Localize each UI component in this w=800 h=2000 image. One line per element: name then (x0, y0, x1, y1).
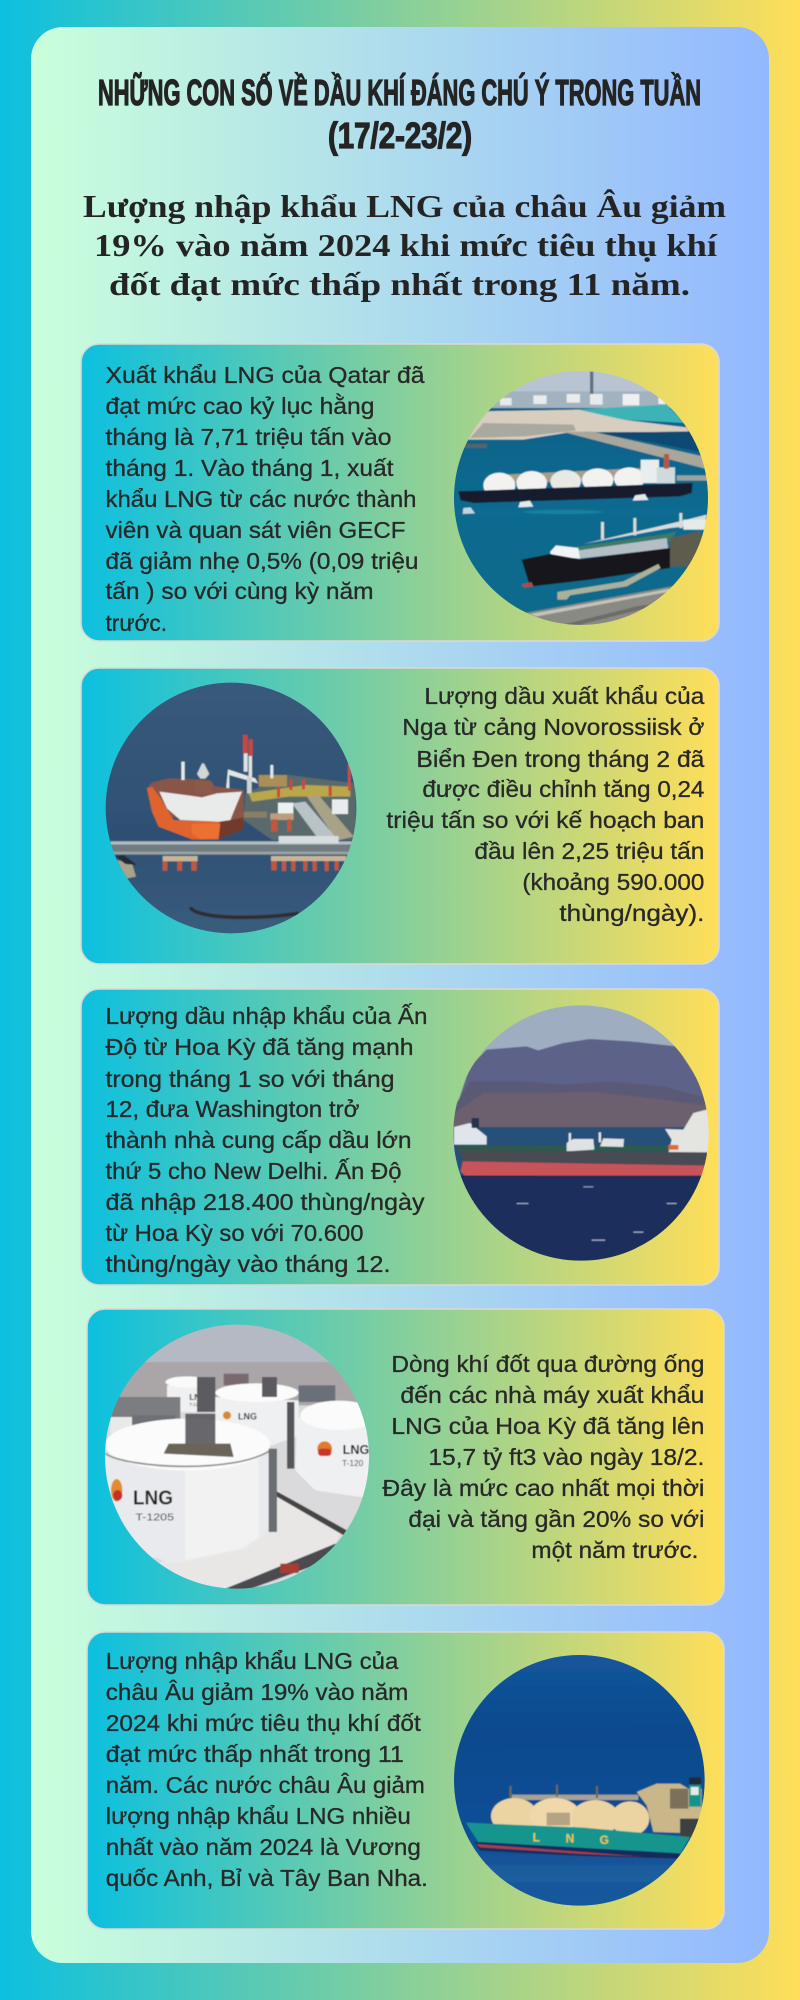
text: Novorossiisk exports: (khoảng 590.000 (522, 869, 704, 895)
text: India imports: thùng/ngày vào tháng 12. (106, 1251, 390, 1277)
panel: Novorossiisk exports (81, 668, 719, 964)
subtitle: 19% vào năm 2024 khi mức tiêu thụ khí (94, 227, 718, 263)
text: US pipeline gas flows (382, 1351, 704, 1563)
photo: oil tanker before hills (450, 1003, 713, 1266)
text: Novorossiisk exports: được điều chỉnh tăng 0,24 (422, 776, 705, 802)
panel: India imports from the US (81, 989, 719, 1285)
text: European LNG imports: đạt mức thấp nhất trong 11 (106, 1741, 404, 1767)
text: European LNG imports: nhất vào năm 2024 là Vương (106, 1834, 421, 1860)
text: US pipeline gas flows: Dòng khí đốt qua đường ống (391, 1351, 704, 1377)
text: European LNG imports: châu Âu giảm 19% vào năm (106, 1679, 408, 1705)
panel: US pipeline gas flows (87, 1309, 724, 1605)
title: (17/2-23/2) (328, 115, 472, 156)
text: US pipeline gas flows: đến các nhà máy xuất khẩu (400, 1382, 704, 1408)
text: US pipeline gas flows: đại và tăng gần 20% so với (408, 1506, 704, 1532)
photo: LNG tanker at sea: G (600, 1833, 609, 1847)
panel: European LNG imports (87, 1632, 724, 1929)
text: Qatar LNG exports: viên và quan sát viên GECF (106, 517, 406, 543)
text: Novorossiisk exports: thùng/ngày). (559, 900, 704, 926)
photo: LNG storage tanks: T-1202 (189, 1402, 203, 1407)
text: Qatar LNG exports: tấn ) so với cùng kỳ năm (106, 578, 374, 604)
photo: LNG storage tanks: T-120 (342, 1458, 364, 1468)
subtitle (83, 188, 726, 302)
text: US pipeline gas flows: LNG của Hoa Kỳ đã tăng lên (391, 1413, 704, 1439)
text: Novorossiisk exports: Biển Đen trong tháng 2 đã (416, 746, 705, 772)
text: Novorossiisk exports: Lượng dầu xuất khẩu của (424, 683, 705, 709)
text: Novorossiisk exports (386, 683, 705, 926)
text: India imports: Độ từ Hoa Kỳ đã tăng mạnh (106, 1034, 414, 1060)
text: Qatar LNG exports: tháng là 7,71 triệu tấn vào (106, 424, 392, 450)
photo: LNG tanker at sea: N (566, 1832, 574, 1846)
text: India imports: Lượng dầu nhập khẩu của Ấn (106, 1002, 427, 1029)
text: India imports: thành nhà cung cấp dầu lớn (106, 1127, 412, 1153)
text: India imports: từ Hoa Kỳ so với 70.600 (106, 1220, 364, 1246)
photo: LNG storage tanks: LNG (189, 1393, 206, 1402)
text: India imports: trong tháng 1 so với tháng (106, 1066, 394, 1092)
text: Novorossiisk exports: triệu tấn so với kế hoạch ban (386, 807, 704, 833)
text: Qatar LNG exports: trước. (106, 610, 167, 636)
text: European LNG imports: Lượng nhập khẩu LNG của (106, 1648, 399, 1674)
text: India imports (106, 1002, 427, 1277)
text: European LNG imports (106, 1648, 428, 1891)
text: Qatar LNG exports (106, 362, 425, 636)
text: US pipeline gas flows: 15,7 tỷ ft3 vào ngày 18/2. (428, 1444, 704, 1470)
text: European LNG imports: quốc Anh, Bỉ và Tây Ban Nha. (106, 1865, 428, 1891)
photo: LNG storage tanks: LNG (238, 1411, 257, 1421)
photo: LNG carriers at Qatar terminal (450, 368, 713, 630)
photo: LNG tanker at sea: L (533, 1830, 540, 1844)
photo: tanker at Novorossiisk oil terminal (102, 680, 362, 940)
text: Novorossiisk exports: đầu lên 2,25 triệu tấn (474, 838, 704, 864)
subtitle: đốt đạt mức thấp nhất trong 11 năm. (109, 266, 690, 302)
photo: LNG tanker at sea (450, 1652, 710, 1912)
subtitle: Lượng nhập khẩu LNG của châu Âu giảm (83, 188, 726, 224)
text: Qatar LNG exports: đã giảm nhẹ 0,5% (0,09 triệu (106, 548, 418, 574)
panel: Qatar LNG exports (81, 344, 719, 641)
text: Qatar LNG exports: Xuất khẩu LNG của Qatar đã (106, 362, 425, 388)
text: European LNG imports: 2024 khi mức tiêu thụ khí đốt (106, 1710, 421, 1736)
title (98, 71, 701, 156)
text: India imports: 12, đưa Washington trở (106, 1096, 360, 1122)
text: Qatar LNG exports: khẩu LNG từ các nước thành (106, 486, 416, 512)
text: Qatar LNG exports: tháng 1. Vào tháng 1, xuất (106, 455, 394, 481)
text: European LNG imports: năm. Các nước châu Âu giảm (106, 1772, 425, 1798)
text: US pipeline gas flows: Đây là mức cao nhất mọi thời (382, 1475, 704, 1501)
photo: LNG storage tanks: LNG (133, 1488, 173, 1510)
text: Novorossiisk exports: Nga từ cảng Novorossiisk ở (402, 714, 704, 740)
text: India imports: đã nhập 218.400 thùng/ngày (106, 1189, 425, 1215)
text: European LNG imports: lượng nhập khẩu LNG nhiều (106, 1803, 411, 1829)
photo: LNG storage tanks: LNG (343, 1443, 370, 1457)
text: India imports: thứ 5 cho New Delhi. Ấn Độ (106, 1157, 402, 1184)
text: Qatar LNG exports: đạt mức cao kỷ lục hằng (106, 393, 374, 419)
photo: LNG storage tanks: T-1205 (135, 1513, 174, 1524)
text: US pipeline gas flows: một năm trước. (531, 1537, 698, 1563)
photo: LNG storage tanks (102, 1322, 377, 1592)
